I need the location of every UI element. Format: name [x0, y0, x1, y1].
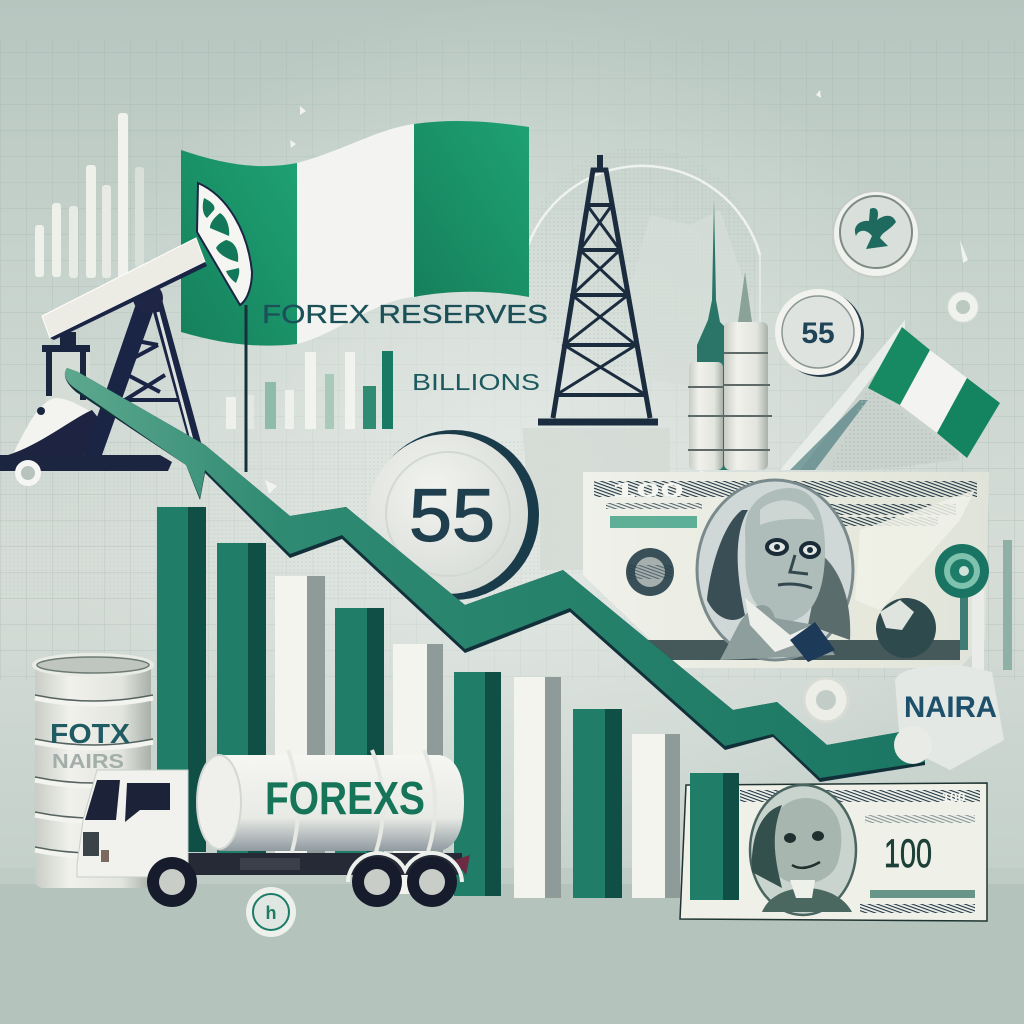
- tanker truck: FOREXS: [265, 772, 425, 824]
- dollar bill: bottom: 100: [884, 832, 932, 876]
- label: billions: BILLIONS: [412, 369, 540, 395]
- tanker truck: h: [266, 903, 276, 923]
- background bar chart left: [35, 113, 144, 278]
- coin: 55 large: 55: [409, 474, 495, 557]
- small ring: [948, 292, 978, 322]
- bill 100 numeral: 100: [612, 480, 684, 502]
- coin: 55 small: 55: [801, 317, 835, 350]
- coin: emblem: [833, 191, 919, 277]
- tanker truck: [77, 750, 470, 937]
- decorative coins right of bill: [804, 540, 1012, 722]
- dollar bill: bottom: [680, 773, 987, 921]
- dollar bill: top: [583, 472, 989, 668]
- large circle outline behind rig: [525, 147, 760, 400]
- naira label: [895, 665, 1004, 770]
- portrait: [697, 480, 853, 662]
- Nigerian flag large: [181, 121, 529, 346]
- coin: 55 large: [368, 430, 539, 600]
- oil derrick tower: [538, 155, 658, 422]
- oil barrels: NAIRS: [52, 751, 124, 773]
- small bar chart center: [226, 351, 393, 429]
- derrick platform: [522, 428, 670, 570]
- small Nigerian flag: [780, 320, 1000, 470]
- foreground bar over bill: [690, 773, 739, 900]
- heading: forex reserves: FOREX RESERVES: [262, 299, 548, 329]
- declining arrow line: [65, 368, 932, 782]
- oil barrels: [34, 655, 153, 888]
- naira label: NAIRA: [904, 691, 997, 724]
- refinery towers: [688, 200, 772, 470]
- bill top band: [594, 481, 977, 497]
- dollar bill: bottom: 100: [942, 789, 966, 805]
- oil barrels: FOTX: [50, 718, 130, 749]
- oil pumpjack: [0, 183, 252, 483]
- bar chart: main bars: [157, 507, 680, 898]
- coin: 55 small: [775, 289, 864, 377]
